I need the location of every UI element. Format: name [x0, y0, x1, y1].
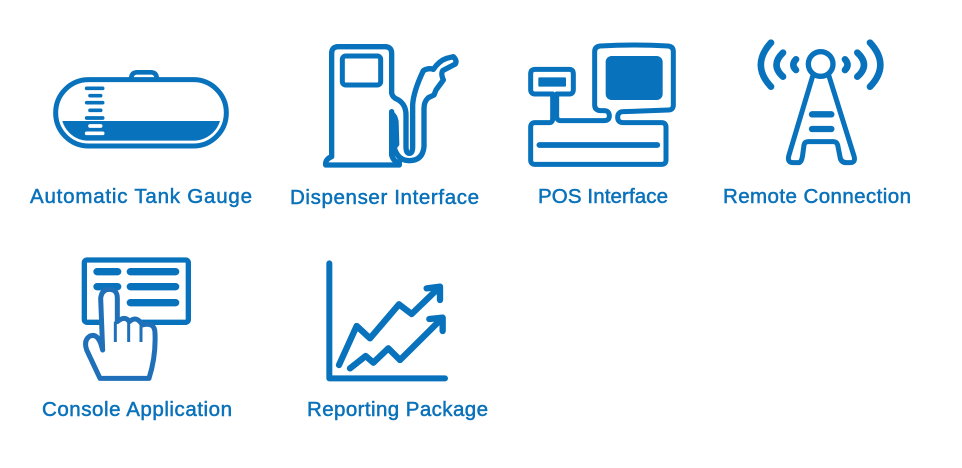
icon: fuel pump: [326, 47, 456, 165]
label: Automatic Tank Gauge: Automatic Tank Gauge: [30, 185, 252, 208]
panel: console application: [42, 260, 232, 421]
icon: fuel tank: [56, 72, 226, 146]
icon: rising line chart: [329, 263, 445, 378]
panel: POS interface: [531, 45, 673, 208]
label: Reporting Package: Reporting Package: [307, 398, 488, 421]
panel: remote connection: [723, 43, 911, 208]
panel: reporting package: [307, 263, 488, 421]
icon: radio tower: [761, 43, 880, 163]
panel: automatic tank gauge: [30, 72, 252, 208]
icon: cash register: [531, 45, 673, 164]
icon: hand touching screen: [84, 260, 188, 378]
panel: dispenser interface: [290, 47, 479, 209]
label: Dispenser Interface: Dispenser Interface: [290, 186, 479, 209]
label: Console Application: Console Application: [42, 398, 232, 421]
label: POS Interface: POS Interface: [538, 185, 668, 208]
label: Remote Connection: Remote Connection: [723, 185, 911, 208]
